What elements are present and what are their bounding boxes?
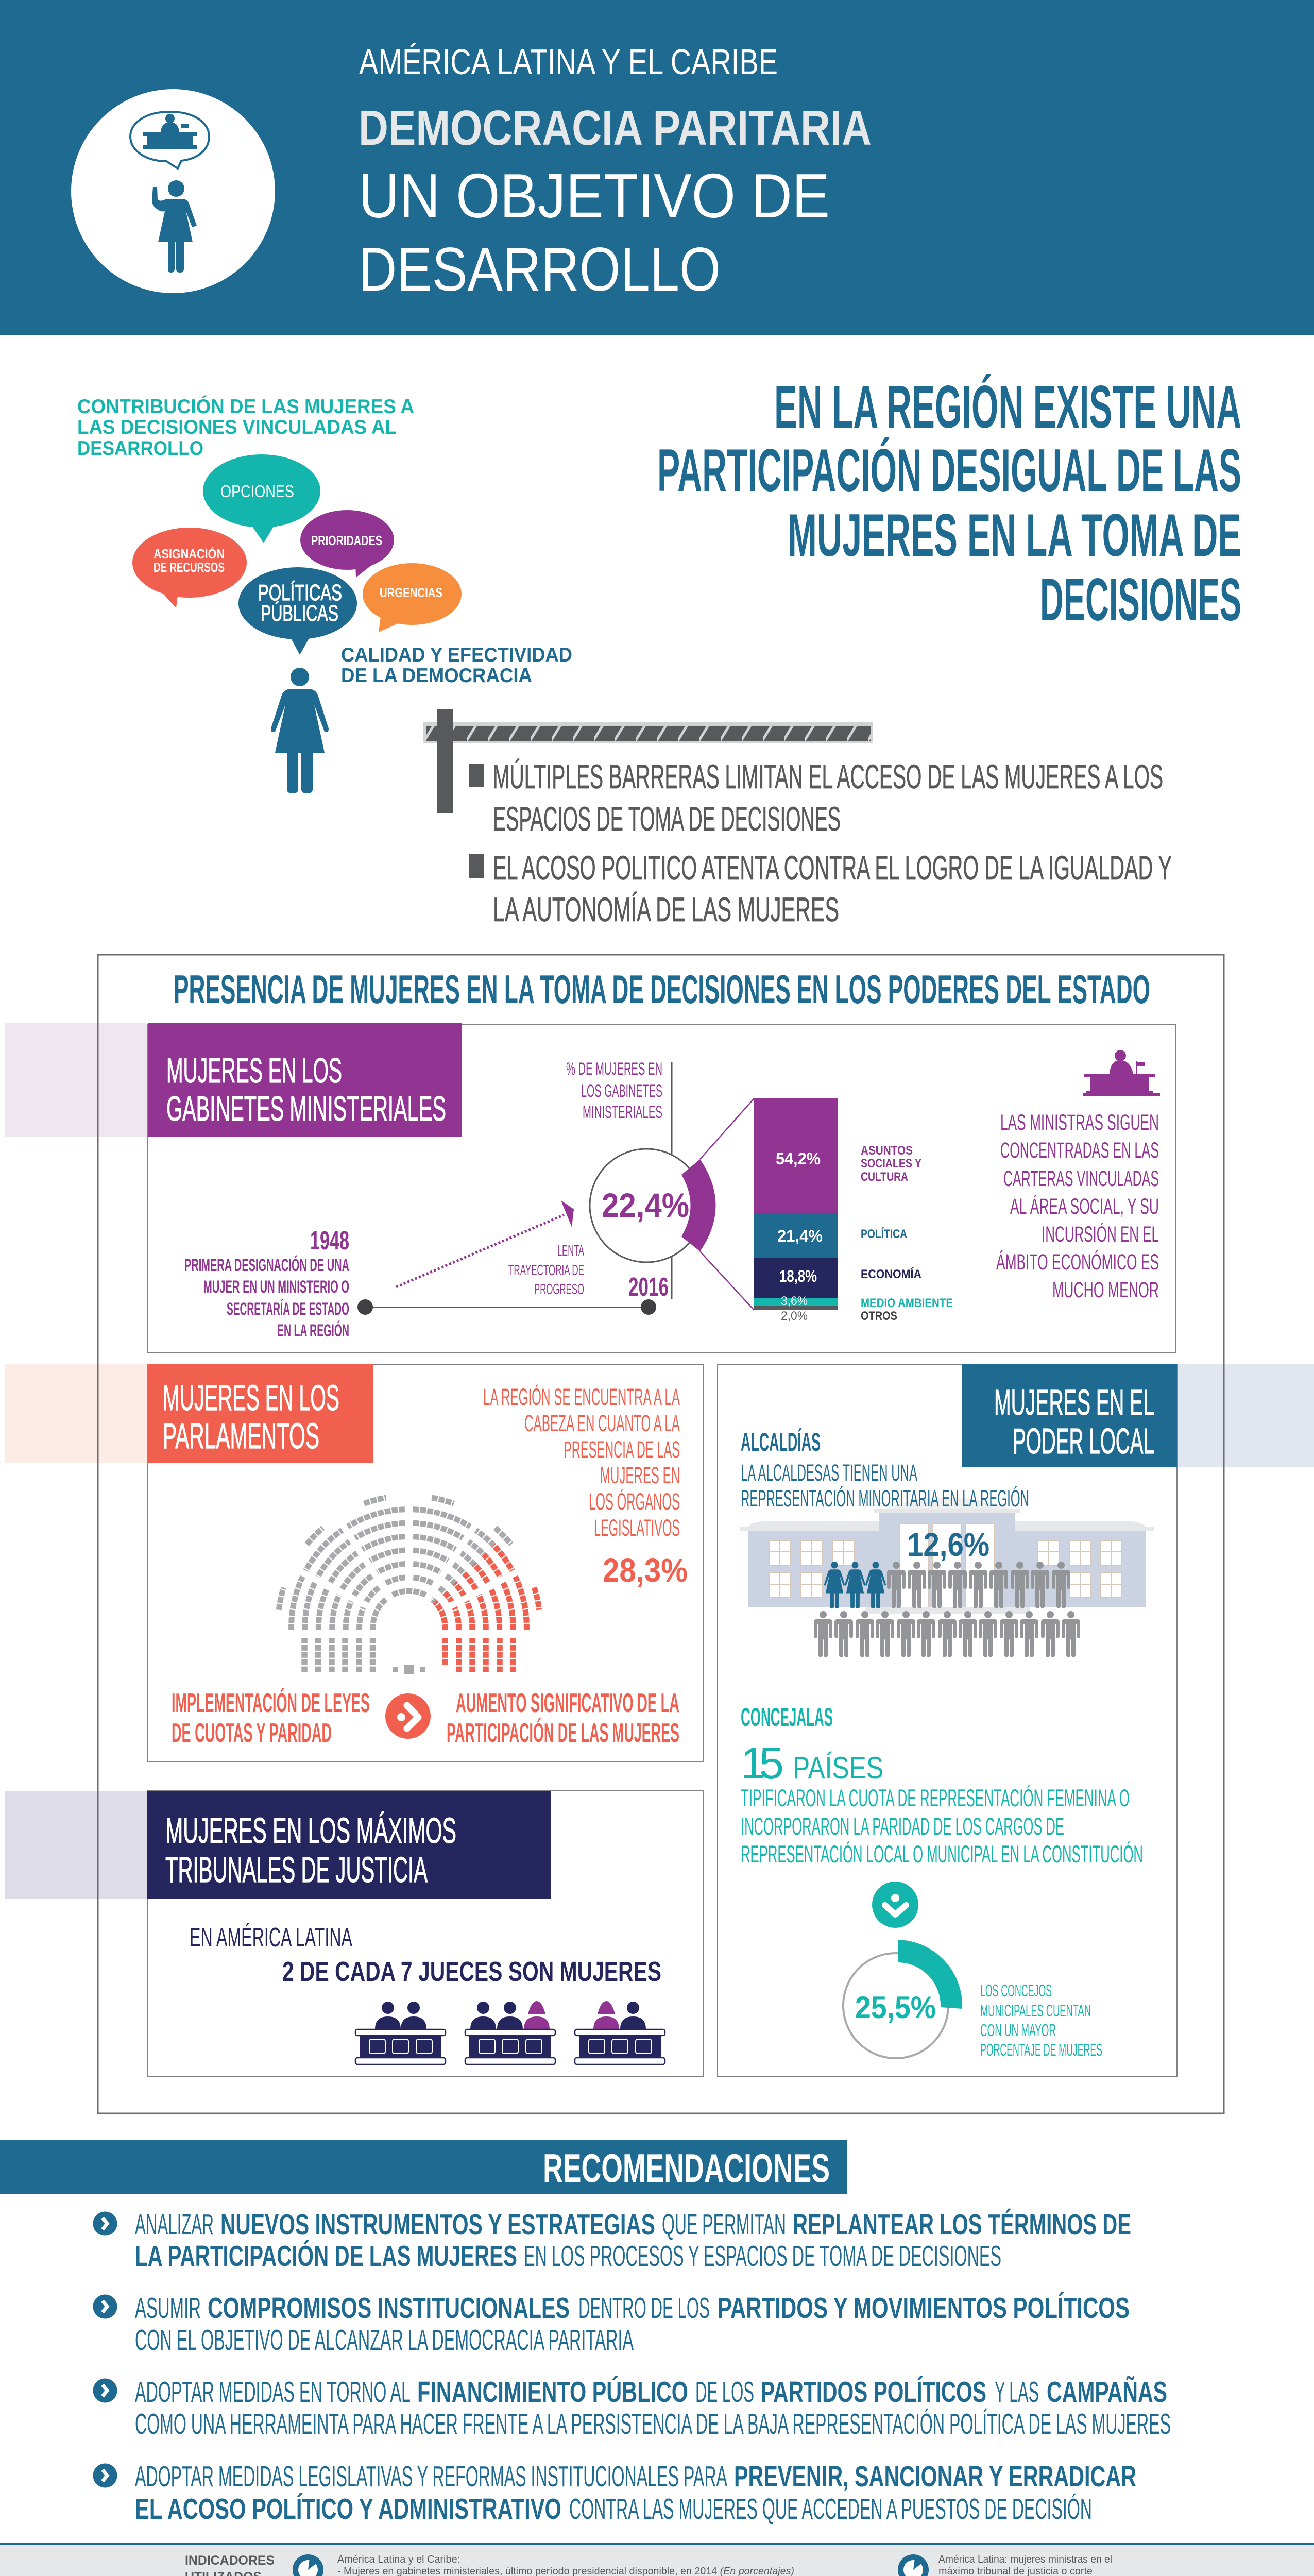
1948 label: EN LA REGIÓN [277, 1321, 349, 1341]
bar legend: MEDIO AMBIENTE [861, 1296, 953, 1310]
recommendation 3: ADOPTAR MEDIDAS EN TORNO AL [135, 2376, 411, 2409]
icon: court bench two [465, 2001, 555, 2064]
stacked bar [754, 1098, 838, 1323]
text: cuotas y paridad: IMPLEMENTACIÓN DE LEYES [172, 1688, 370, 1718]
heading: parlamentos: MUJERES EN LOS [163, 1378, 339, 1418]
bar legend: OTROS [861, 1309, 897, 1323]
alcaldias text: LA ALCALDESAS TIENEN UNA [741, 1460, 917, 1486]
indicators heading [185, 2553, 275, 2576]
heading: parlamentos [147, 1364, 373, 1463]
contribution heading: CONTRIBUCIÓN DE LAS MUJERES A [77, 395, 414, 418]
header title: AMÉRICA LATINA Y EL CARIBE [359, 42, 778, 82]
recommendation 1: ANALIZAR [135, 2208, 214, 2241]
recommendation 2: DENTRO DE LOS [578, 2292, 710, 2325]
axis caption [566, 1059, 662, 1122]
bubble: urgencias: URGENCIAS [380, 586, 442, 600]
panel: parlamentos [147, 1364, 704, 1762]
quality caption: DE LA DEMOCRACIA [341, 665, 532, 687]
recommendation 4: ADOPTAR MEDIDAS LEGISLATIVAS Y REFORMAS INSTITUCIONALES PARA [135, 2460, 727, 2493]
slow progress label: PROGRESO [534, 1281, 584, 1298]
barriers text: LA AUTONOMÍA DE LAS MUJERES [493, 890, 839, 928]
chart: parliament seats [279, 1498, 539, 1674]
main headline [657, 373, 1241, 633]
heading: poder local: MUJERES EN EL [994, 1382, 1154, 1422]
bubble: opciones: OPCIONES [220, 482, 294, 501]
icon: town hall building [740, 1497, 1154, 1614]
bubble: politicas publicas: POLÍTICAS [258, 580, 342, 605]
alcaldias text: ALCALDÍAS [741, 1428, 821, 1456]
alcaldias text [741, 1428, 917, 1486]
1948 label: PRIMERA DESIGNACIÓN DE UNA [184, 1256, 349, 1275]
header title: DEMOCRACIA PARITARIA [359, 100, 872, 156]
heading: poder local [962, 1364, 1177, 1467]
region text: MUJERES EN [600, 1462, 680, 1488]
bar legend [861, 1144, 953, 1323]
stacked bar: 3,6% [781, 1294, 808, 1308]
recommendation 1: NUEVOS INSTRUMENTOS Y ESTRATEGIAS [220, 2208, 655, 2241]
donut 25,5% [843, 1940, 962, 2058]
region text: CABEZA EN CUANTO A LA [524, 1410, 680, 1436]
recommendation 3: PARTIDOS POLÍTICOS [761, 2376, 986, 2409]
axis caption: LOS GABINETES [581, 1081, 662, 1101]
value 28,3%: 28,3% [603, 1552, 688, 1589]
text: cuotas y paridad: DE CUOTAS Y PARIDAD [172, 1718, 332, 1748]
bar legend: CULTURA [861, 1170, 908, 1184]
recommendation 2 [93, 2292, 1130, 2357]
heading: tribunales: TRIBUNALES DE JUSTICIA [165, 1850, 428, 1890]
axis caption: MINISTERIALES [583, 1103, 662, 1122]
header band [0, 0, 1314, 335]
bar legend: ECONOMÍA [861, 1267, 921, 1281]
bubble: prioridades [300, 510, 394, 578]
header title: UN OBJETIVO DE [359, 161, 830, 231]
recommendation 2: CON EL OBJETIVO DE ALCANZAR LA DEMOCRACIA PARITARIA [135, 2324, 634, 2357]
donut 22,4%: 22,4% [602, 1186, 689, 1224]
icon: court bench one [355, 2002, 446, 2064]
icon: woman [271, 668, 329, 793]
heading: poder local: PODER LOCAL [1013, 1421, 1154, 1461]
indicators list right: América Latina: mujeres ministras en el [938, 2554, 1112, 2565]
text: aumento significativo [447, 1688, 679, 1748]
recommendation 1 [93, 2208, 1131, 2273]
ministers text [996, 1110, 1159, 1302]
recommendation 1: QUE PERMITAN [662, 2208, 786, 2241]
councils text: MUNICIPALES CUENTAN [980, 2001, 1091, 2020]
contribution heading [77, 395, 414, 460]
panel: gabinetes ministeriales [148, 1023, 1176, 1352]
councils text [980, 1981, 1102, 2059]
recommendation 4: PREVENIR, SANCIONAR Y ERRADICAR [734, 2460, 1136, 2493]
recommendations heading [0, 2140, 847, 2194]
2016 label: 2016 [628, 1272, 669, 1301]
icon: court bench three [575, 2001, 665, 2064]
concejalas text: CONCEJALAS [741, 1703, 833, 1732]
ministers text: ÁMBITO ECONÓMICO ES [996, 1250, 1159, 1275]
text: cuotas y paridad [172, 1688, 370, 1748]
region text: LOS ÓRGANOS [589, 1488, 680, 1515]
indicators list right [938, 2554, 1112, 2576]
text: aumento significativo: PARTICIPACIÓN DE LAS MUJERES [447, 1718, 679, 1748]
header icon: woman with speech bubble [71, 89, 275, 293]
recommendation 3: CAMPAÑAS [1047, 2376, 1167, 2409]
region text: LA REGIÓN SE ENCUENTRA A LA [483, 1384, 680, 1410]
concejalas text [741, 1703, 1143, 1868]
recommendation 3: FINANCIMIENTO PÚBLICO [417, 2376, 688, 2409]
heading: parlamentos: PARLAMENTOS [163, 1416, 319, 1456]
concejalas text: PAÍSES [793, 1751, 883, 1785]
recommendation 3 [93, 2376, 1171, 2441]
axis caption: % DE MUJERES EN [566, 1059, 662, 1079]
icon: podium [1083, 1050, 1160, 1096]
recommendation 2: PARTIDOS Y MOVIMIENTOS POLÍTICOS [718, 2292, 1130, 2325]
ministers text: AL ÁREA SOCIAL, Y SU [1010, 1194, 1159, 1219]
arrow: dotted progress [396, 1200, 574, 1287]
heading: gabinetes: GABINETES MINISTERIALES [166, 1089, 446, 1128]
donut 25,5%: 25,5% [855, 1990, 936, 2025]
timeline axis [357, 1062, 672, 1315]
recommendation 2: ASUMIR [135, 2292, 201, 2325]
bubble: asignacion de recursos: ASIGNACIÓN [153, 546, 225, 562]
bubble: urgencias [363, 563, 462, 632]
councils text: LOS CONCEJOS [980, 1981, 1052, 2000]
header title: DESARROLLO [359, 235, 721, 304]
ministers text: CARTERAS VINCULADAS [1003, 1166, 1159, 1191]
bubble: asignacion de recursos: DE RECURSOS [153, 560, 225, 575]
recommendation 4: EL ACOSO POLÍTICO Y ADMINISTRATIVO [135, 2493, 561, 2526]
bubble: prioridades: PRIORIDADES [311, 533, 382, 548]
bar legend: SOCIALES Y [861, 1157, 921, 1171]
bubble: opciones [203, 454, 320, 543]
panel: poder local [718, 1364, 1177, 2076]
recommendation 1: REPLANTEAR LOS TÉRMINOS DE [793, 2208, 1131, 2241]
representation text: REPRESENTACIÓN MINORITARIA EN LA REGIÓN [741, 1485, 1029, 1512]
indicators list left [337, 2554, 822, 2576]
recommendation 2: COMPROMISOS INSTITUCIONALES [208, 2292, 570, 2325]
slow progress label [508, 1243, 584, 1298]
heading: tribunales [147, 1791, 551, 1899]
councils text: PORCENTAJE DE MUJERES [980, 2040, 1102, 2059]
panel: tribunales de justicia [147, 1791, 703, 2076]
bubble: politicas publicas: PÚBLICAS [261, 601, 338, 626]
slow progress label: TRAYECTORIA DE [508, 1262, 584, 1279]
contribution heading: DESARROLLO [77, 437, 203, 460]
1948 label: SECRETARÍA DE ESTADO [227, 1299, 349, 1319]
icon: pie right [898, 2554, 929, 2576]
stacked bar: 2,0% [781, 1309, 808, 1323]
contribution heading: LAS DECISIONES VINCULADAS AL [77, 416, 397, 438]
ministers text: MUCHO MENOR [1052, 1278, 1159, 1302]
icon: pie left [293, 2554, 323, 2576]
pictogram: mayors [814, 1562, 1080, 1657]
recommendation 3: Y LAS [995, 2376, 1039, 2409]
recommendation 4 [93, 2460, 1136, 2526]
panel: contribution of women [77, 395, 572, 793]
bubble: politicas publicas [238, 567, 357, 655]
1948 label: 1948 [310, 1226, 349, 1255]
panel: presence of women in state powers [5, 955, 1314, 2113]
1948 label [184, 1226, 349, 1341]
indicators heading: INDICADORES [185, 2553, 275, 2568]
text: aumento significativo: AUMENTO SIGNIFICATIVO DE LA [456, 1688, 679, 1718]
quality caption [341, 644, 572, 687]
heading: tribunales: MUJERES EN LOS MÁXIMOS [165, 1810, 456, 1851]
quality caption: CALIDAD Y EFECTIVIDAD [341, 644, 572, 666]
bubble: asignacion de recursos [132, 528, 247, 608]
panel: indicators [0, 2543, 1314, 2576]
ministers text: CONCENTRADAS EN LAS [1000, 1138, 1159, 1163]
header title [359, 42, 872, 304]
icon: barrier [423, 709, 873, 813]
heading: gabinetes [148, 1023, 462, 1137]
justice text: 2 DE CADA 7 JUECES SON MUJERES [282, 1956, 661, 1987]
region text: PRESENCIA DE LAS [564, 1436, 680, 1463]
barriers text: ESPACIOS DE TOMA DE DECISIONES [493, 800, 841, 838]
slow progress label: LENTA [557, 1243, 584, 1259]
barriers text [469, 757, 1172, 928]
ministers text: INCURSIÓN EN EL [1042, 1222, 1159, 1247]
heading: gabinetes: MUJERES EN LOS [166, 1051, 342, 1090]
ministers text: LAS MINISTRAS SIGUEN [1000, 1110, 1159, 1135]
recommendation 1: LA PARTICIPACIÓN DE LAS MUJERES [135, 2240, 517, 2273]
concejalas text: 15 [741, 1738, 784, 1788]
stacked bar: 54,2% [776, 1149, 821, 1168]
recommendations list [93, 2208, 1171, 2526]
bar legend: POLÍTICA [861, 1227, 907, 1241]
icon: down chevron circle [872, 1882, 918, 1928]
justice text: EN AMÉRICA LATINA [190, 1923, 352, 1953]
stacked bar: 18,8% [779, 1267, 817, 1285]
councils text: CON UN MAYOR [980, 2021, 1056, 2040]
region text: LEGISLATIVOS [594, 1515, 680, 1541]
bar legend: ASUNTOS [861, 1144, 913, 1158]
recommendations heading: RECOMENDACIONES [543, 2145, 830, 2191]
region text [483, 1384, 680, 1541]
justice text [190, 1923, 661, 1987]
icon: arrow circle [385, 1693, 431, 1739]
recommendation 3: DE LOS [695, 2376, 754, 2409]
indicators list left: América Latina y el Caribe: [337, 2554, 460, 2565]
1948 label: MUJER EN UN MINISTERIO O [203, 1277, 349, 1297]
funnel lines [700, 1098, 754, 1310]
value 12,6%: 12,6% [907, 1526, 989, 1563]
donut 22,4% [590, 1149, 716, 1262]
stacked bar: 21,4% [777, 1227, 823, 1245]
